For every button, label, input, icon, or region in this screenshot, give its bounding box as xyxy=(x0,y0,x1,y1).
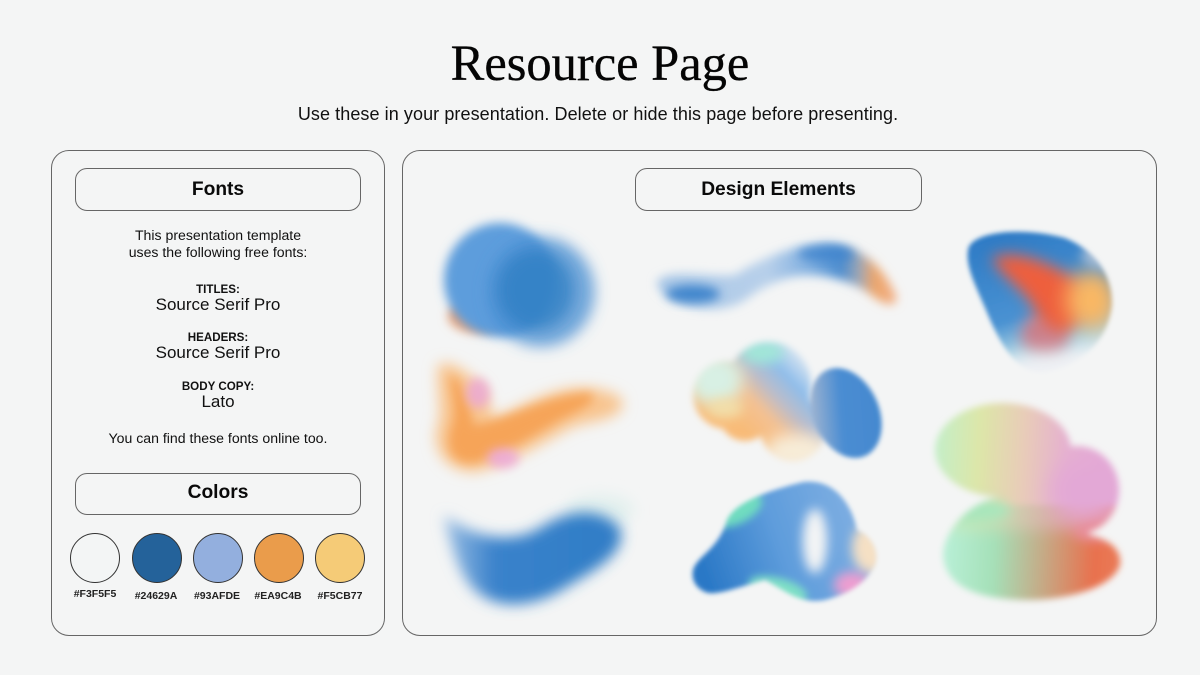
text block: titles font: Source Serif Pro xyxy=(156,295,280,314)
blob: blue-orange swoosh xyxy=(657,243,897,309)
subtitle: Use these in your presentation. Delete or hide this page before presenting. xyxy=(298,104,898,124)
swatch: F3F5F5 xyxy=(70,533,120,583)
blob: blue brush stroke xyxy=(444,494,634,604)
label: 24629A: #24629A xyxy=(135,590,177,602)
heading: colors: Colors xyxy=(188,482,248,503)
swatch: 93AFDE xyxy=(193,533,243,583)
heading: design elements xyxy=(635,168,922,211)
text block: body font: Lato xyxy=(201,392,235,411)
panel: fonts and colors xyxy=(51,150,385,636)
swatch: EA9C4B xyxy=(254,533,304,583)
blob: blue overlapping circles xyxy=(444,223,595,347)
text block: body font: BODY COPY: xyxy=(182,380,254,393)
blob: cloud with blue ellipse xyxy=(689,338,886,464)
text block: headers font: HEADERS: xyxy=(188,331,248,344)
text block: body font xyxy=(182,380,254,411)
swatch: 24629A xyxy=(132,533,182,583)
blob: pastel gradient petals xyxy=(932,399,1125,604)
blob: orange splash xyxy=(436,363,623,472)
text block: intro: This presentation template xyxy=(135,227,301,243)
panel: design elements xyxy=(402,150,1157,636)
blob: blue-red-orange shield xyxy=(964,228,1115,366)
heading: design elements: Design Elements xyxy=(701,179,856,200)
label: 93AFDE: #93AFDE xyxy=(194,590,240,602)
text block: titles font: TITLES: xyxy=(196,283,240,296)
text block: titles font xyxy=(156,283,280,314)
heading: colors xyxy=(75,473,361,515)
swatch: F5CB77 xyxy=(315,533,365,583)
title: Resource Page xyxy=(451,35,749,91)
heading: fonts xyxy=(75,168,361,211)
label: F5CB77: #F5CB77 xyxy=(318,590,362,602)
text block: intro xyxy=(129,227,307,260)
text block: intro: uses the following free fonts: xyxy=(129,244,307,260)
text block: headers font xyxy=(156,331,280,362)
text block: note: You can find these fonts online too. xyxy=(109,430,327,446)
label: F3F5F5: #F3F5F5 xyxy=(74,588,116,600)
heading: fonts: Fonts xyxy=(192,179,244,200)
label: EA9C4B: #EA9C4B xyxy=(254,590,302,602)
blobs artwork xyxy=(427,216,1125,616)
text block: headers font: Source Serif Pro xyxy=(156,343,280,362)
blob: blue ring with mint and pink xyxy=(688,478,878,604)
